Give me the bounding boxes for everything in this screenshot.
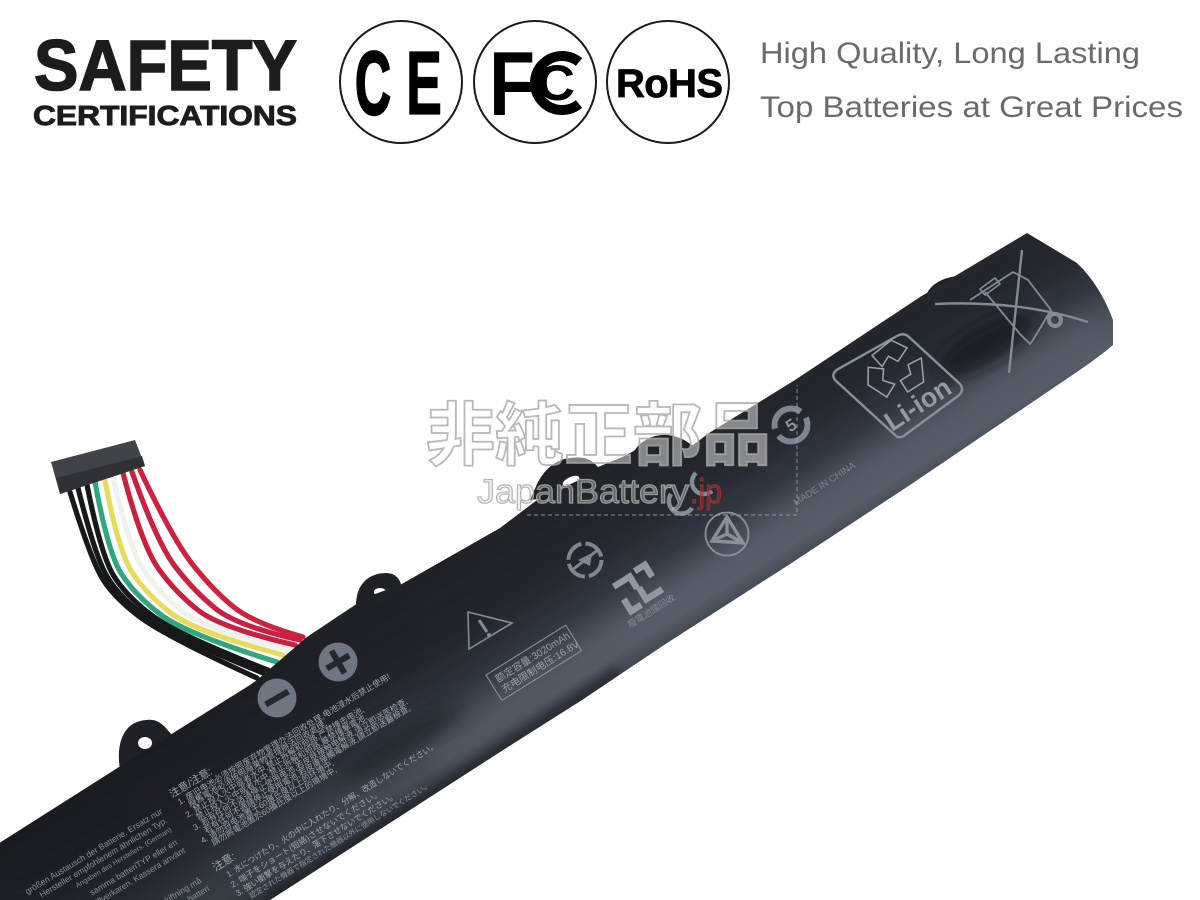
polarity icon: minus xyxy=(258,678,296,718)
text: Chinese caution block xyxy=(167,660,421,853)
warning triangle icon xyxy=(468,612,512,649)
text: Chinese caution block: 1. 废旧电池必须按照废弃物管理办法回收处理,电池浸水后禁止使用! xyxy=(176,671,392,807)
icon: CE mark: C xyxy=(355,34,391,134)
rating label: 充电限制电压:16.8V xyxy=(499,637,582,696)
icon: FC mark: C xyxy=(537,55,575,111)
rating label: 额定容量:3020mAh xyxy=(493,629,572,685)
watermark: JapanBattery xyxy=(477,473,689,511)
watermark: .jp xyxy=(690,473,722,511)
text: Chinese caution block: 禁止投入火中或者水中,禁止拆解和短路,嚴禁撞擊電池, xyxy=(194,711,369,822)
icon: FC mark xyxy=(474,21,596,143)
rating label xyxy=(486,625,583,700)
icon: power cycle C xyxy=(669,473,712,514)
text: Chinese caution block: 3. 若有任何不适请停止使用电池,若皮肤接触电解液,请立即送医检查, xyxy=(191,696,409,832)
text: Japanese caution block: 認定された機器で指定された機器以外に使用しないでください。 xyxy=(248,780,432,900)
icon: taiwan recycling mark: 廢電池請回收 xyxy=(625,592,677,630)
icon: 5 year cycle xyxy=(774,408,808,442)
text: made in china: MADE IN CHINA xyxy=(792,460,858,509)
icon: RoHS mark xyxy=(607,21,729,143)
text: German and Swedish warning block: samma batteriTYP eller en xyxy=(88,837,179,897)
icon: CE mark xyxy=(340,21,462,143)
tab holes xyxy=(138,452,668,749)
icon: taiwan recycling mark xyxy=(613,564,677,630)
icon: recycle circle xyxy=(568,544,602,576)
Li-ion recycling badge: Li-ion xyxy=(879,372,957,437)
icon: FC mark: F xyxy=(489,34,535,135)
dashed crop box xyxy=(527,385,797,515)
text: Chinese caution block: 請勿將電池置於60攝氏度以上的環境中, xyxy=(209,765,338,848)
text: Chinese caution block: 注意/注意: xyxy=(167,765,215,801)
Li-ion recycling badge xyxy=(833,332,962,437)
connector xyxy=(51,440,145,494)
tagline: Top Batteries at Great Prices xyxy=(760,91,1183,124)
text: Chinese caution block: 廢舊電池必須按照廢棄物管理辦法回收處理, xyxy=(186,718,329,809)
text: Japanese caution block: 注意: xyxy=(210,850,238,874)
icon: RoHS mark: RoHS xyxy=(616,62,723,106)
text: German and Swedish warning block: größen Austausch der Batterie. Ersatz nur xyxy=(23,806,164,896)
tagline xyxy=(760,37,1183,124)
polarity icon: plus xyxy=(318,642,358,682)
icon: CE mark: E xyxy=(406,34,442,134)
text: Chinese caution block: 4. 请勿将电池置于60摄氏度以上的环境中, xyxy=(199,758,336,845)
text: German and Swedish warning block: Angaben des Herstellers. (German) xyxy=(75,827,173,890)
heading: safety certifications: CERTIFICATIONS xyxy=(33,100,297,131)
text: Japanese caution block: 1. 水につけたり、火の中に入れたり、分解、改造しないでください。 xyxy=(224,740,439,879)
text: Chinese caution block: 2. 禁止投入火中或者水中,禁止拆解和短路,严禁撞击电池, xyxy=(183,704,366,820)
text: Japanese caution block: 2. 端子をショート(短絡)させないでください。 xyxy=(228,788,383,890)
mounting tabs xyxy=(119,276,965,770)
wires xyxy=(70,470,303,678)
text: Chinese caution block: 若有任何不適請停止使用電池,若皮膚接觸電解液,請立即送醫檢查, xyxy=(202,703,412,835)
watermark: 非純正部品 xyxy=(426,397,771,474)
battery body xyxy=(0,230,1113,900)
watermark xyxy=(426,397,771,511)
icon: 5 year cycle: 5 xyxy=(782,415,800,436)
text: Japanese caution block: 3. 強い衝撃を与えたり、落下させないでください。 xyxy=(234,790,399,898)
heading: safety certifications: SAFETY xyxy=(34,27,297,106)
icon: crossed-out bin xyxy=(935,250,1088,373)
tagline: High Quality, Long Lasting xyxy=(760,37,1140,70)
text: German and Swedish warning block: Hersteller empfohlenem ähnlichen Typ. xyxy=(38,815,169,900)
icon: triangle circle xyxy=(706,512,748,556)
